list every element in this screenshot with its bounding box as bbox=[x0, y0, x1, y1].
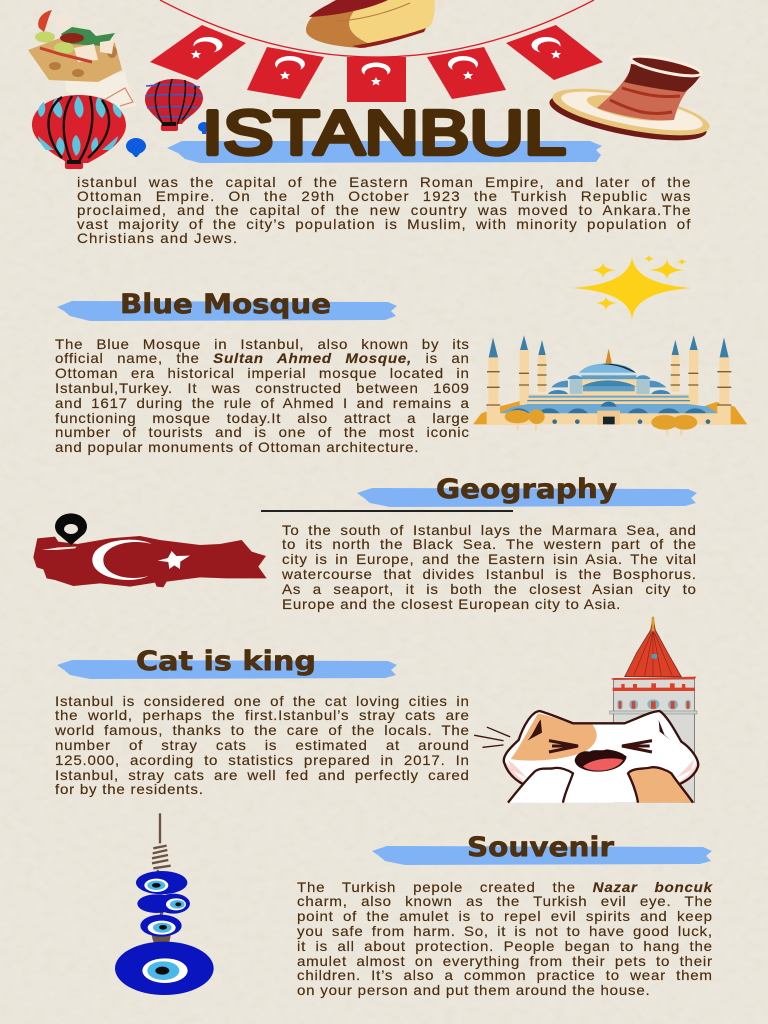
icon: location pin bbox=[55, 513, 87, 545]
icon: blue balloon large bbox=[126, 138, 146, 157]
heading: Geography: Geography bbox=[436, 474, 617, 505]
text block: Souvenir bbox=[297, 879, 713, 998]
heading: Geography bbox=[357, 474, 697, 507]
bunting string bbox=[160, 0, 594, 57]
title brush stroke bbox=[167, 141, 602, 163]
heading: Cat is king: Cat is king bbox=[136, 646, 316, 677]
text block: Souvenir: it is all about protection. People began to hang the bbox=[297, 938, 713, 954]
text block: Souvenir: you safe from harm. So, it is not to have good luck, bbox=[297, 923, 713, 939]
text block: Cat is king bbox=[54, 693, 470, 798]
cat face bbox=[504, 711, 698, 803]
text block: Cat is king: the world, perhaps the first.Istanbul’s stray cats are bbox=[55, 707, 470, 723]
panel: Geography bbox=[33, 474, 697, 612]
bunting: Turkish flags bbox=[150, 25, 603, 102]
text block: Blue Mosque: official name, the Sultan Ahmed Mosque, is an bbox=[55, 350, 470, 366]
icon: tea glass on saucer bbox=[546, 52, 713, 150]
text block: intro: vast majority of the city’s population is Muslim, with minority population of bbox=[77, 216, 692, 232]
text block: Cat is king: 125.000, acording to statistics prepared in 2017. In bbox=[55, 752, 470, 768]
text block: Geography: watercourse that divides Istanbul is the Bosphorus. bbox=[282, 566, 697, 582]
text block: intro: istanbul was the capital of the Eastern Roman Empire, and later of the bbox=[77, 174, 692, 190]
text block: Cat is king: number of stray cats is estimated at around bbox=[55, 737, 470, 753]
heading: Cat is king bbox=[57, 646, 397, 679]
text block: Blue Mosque: functioning mosque today.It also attract a large bbox=[55, 410, 470, 426]
heading: Blue Mosque: Blue Mosque bbox=[120, 289, 331, 320]
panel: header bbox=[28, 0, 710, 246]
icon: large hot air balloon bbox=[32, 95, 126, 169]
icon: sparkles bbox=[572, 255, 692, 320]
panel: Souvenir bbox=[115, 813, 713, 998]
text block: Geography bbox=[282, 522, 697, 612]
text block: Geography: As a seaport, it is both the closest Asian city to bbox=[282, 581, 697, 597]
text block: Geography: city is in Europe, and the Eastern isin Asia. The vital bbox=[282, 551, 697, 567]
text block: Cat is king: Istanbul is considered one of the cat loving cities in bbox=[55, 693, 470, 709]
icon: Nazar boncuk evil eye charm bbox=[115, 813, 214, 995]
icon: doner wrap bbox=[28, 10, 136, 108]
text block: Souvenir: on your person and put them around the house. bbox=[297, 982, 650, 998]
text block: Geography: To the south of Istanbul lays the Marmara Sea, and bbox=[282, 522, 697, 538]
text block: Cat is king: Istanbul, stray cats are well fed and perfectly cared bbox=[55, 767, 470, 783]
heading: Souvenir bbox=[372, 832, 712, 865]
text block: Souvenir: amulet almost on everything from their pets to their bbox=[297, 953, 713, 969]
text block: Blue Mosque: Ottoman era historical imperial mosque located in bbox=[55, 365, 470, 381]
heading: Blue Mosque bbox=[57, 289, 397, 321]
icon: map of Turkey with flag bbox=[33, 536, 267, 587]
text block: intro: proclaimed, and the capital of the new country was moved to Ankara.The bbox=[77, 202, 692, 218]
icon: blue balloon small bbox=[198, 122, 210, 134]
illustration: Galata Tower and cat bbox=[475, 617, 698, 803]
heading: Souvenir: Souvenir bbox=[467, 832, 615, 863]
text block: Souvenir: The Turkish pepole created the Nazar boncuk bbox=[297, 879, 713, 895]
text block: Blue Mosque: and 1617 during the rule of Ahmed I and remains a bbox=[55, 395, 470, 411]
text block: Souvenir: point of the amulet is to repel evil spirits and keep bbox=[297, 908, 713, 924]
illustration: Blue Mosque bbox=[473, 335, 747, 435]
text block: Blue Mosque bbox=[55, 336, 470, 456]
text block: intro: Ottoman Empire. On the 29th October 1923 the Turkish Republic was bbox=[77, 188, 692, 204]
text block: intro: Christians and Jews. bbox=[77, 230, 238, 246]
panel: Cat is king bbox=[54, 616, 700, 804]
text block: Geography: Europe and the closest European city to Asia. bbox=[282, 596, 621, 612]
text block: Blue Mosque: number of tourists and is one of the most iconic bbox=[55, 424, 470, 440]
text block: Blue Mosque: and popular monuments of Ottoman architecture. bbox=[55, 439, 419, 455]
icon: pot of food bbox=[306, 0, 435, 48]
text block: Cat is king: world famous, thanks to the care of the locals. The bbox=[55, 722, 470, 738]
text block: Blue Mosque: Istanbul,Turkey. It was constructed between 1609 bbox=[55, 380, 470, 396]
icon: small hot air balloon bbox=[145, 79, 203, 131]
panel: Blue Mosque bbox=[55, 255, 748, 456]
text block: Geography: to its north the Black Sea. The western part of the bbox=[282, 536, 697, 552]
text block: Souvenir: charm, also known as the Turkish evil eye. The bbox=[297, 893, 713, 909]
text block: Blue Mosque: The Blue Mosque in Istanbul, also known by its bbox=[55, 336, 470, 352]
text block: Cat is king: for by the residents. bbox=[55, 781, 204, 797]
text block: Souvenir: children. It’s also a common practice to wear them bbox=[297, 967, 713, 983]
title: ISTANBUL bbox=[202, 99, 566, 168]
text block: intro bbox=[77, 174, 692, 246]
